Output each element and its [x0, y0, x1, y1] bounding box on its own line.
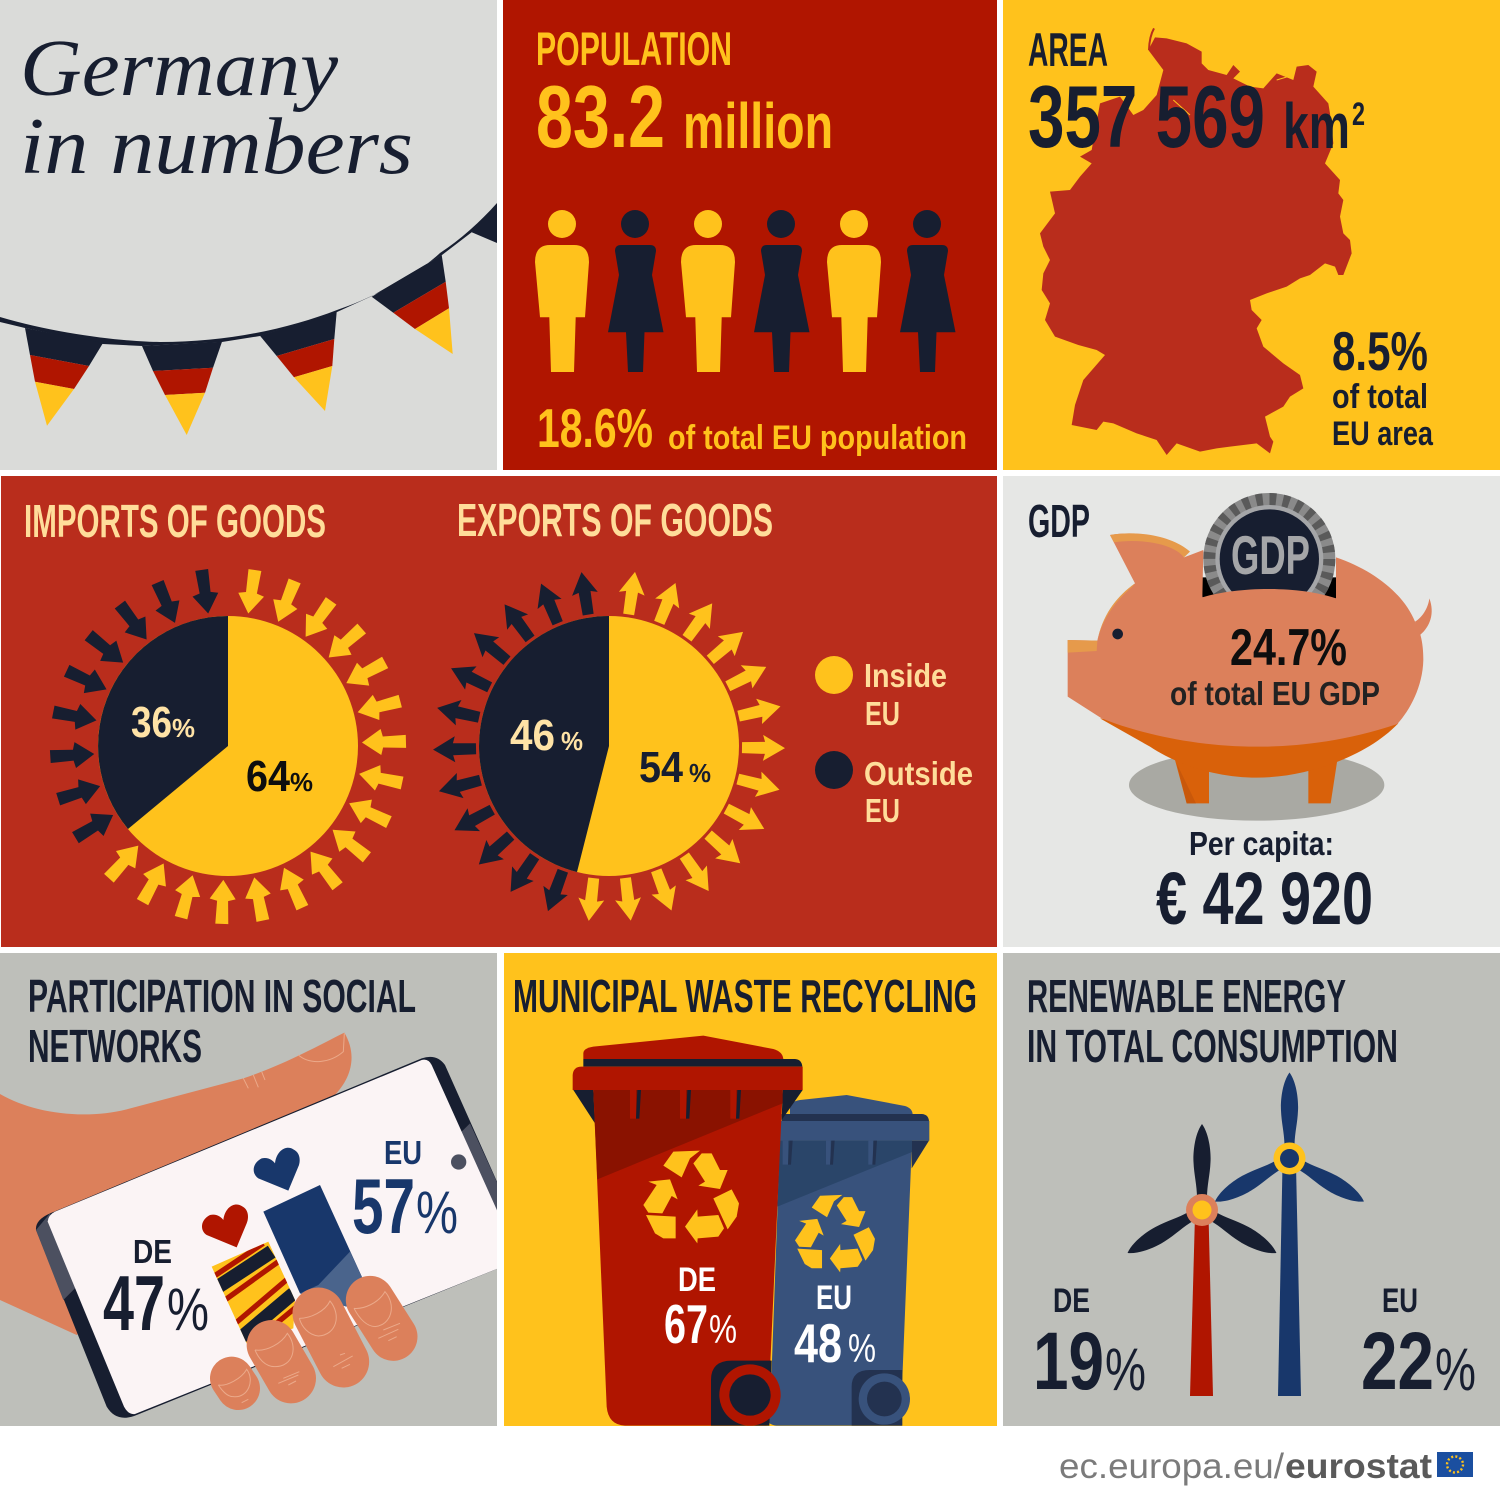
value: DE 47% — [104, 1240, 208, 1330]
value: EU 57%: % — [416, 1179, 458, 1246]
heading: area: AREA — [1028, 23, 1108, 76]
legend: Outside — [864, 755, 973, 792]
value: EU 22%: 22 — [1361, 1316, 1434, 1407]
panel: municipal waste recycling — [504, 953, 997, 1426]
panel: title — [0, 0, 497, 470]
population value: million — [683, 90, 833, 162]
title: Germany — [20, 25, 339, 113]
map: Germany — [1040, 28, 1352, 455]
footer: source: ec.europa.eu/ — [1059, 1447, 1284, 1486]
heading: social networks: PARTICIPATION IN SOCIAL — [28, 970, 416, 1022]
value: DE 67% — [665, 1268, 736, 1344]
GDP share: 24.7% — [1230, 619, 1347, 677]
icon: red wind turbine — [1123, 1124, 1281, 1396]
value: DE 19% — [1033, 1282, 1146, 1407]
title — [24, 41, 410, 174]
value: EU 57% — [354, 1141, 456, 1234]
chart: imports pie with arrows: % — [290, 767, 313, 797]
heading: social networks: NETWORKS — [28, 1020, 202, 1072]
panel: social networks — [0, 953, 507, 1426]
value: DE 19%: DE — [1053, 1282, 1090, 1320]
heading: GDP: GDP — [1028, 495, 1090, 547]
area share — [1332, 320, 1434, 453]
population value: 83.2 — [536, 67, 665, 166]
panel: population — [503, 0, 997, 470]
value: EU 22%: EU — [1382, 1282, 1418, 1320]
legend: EU — [865, 792, 900, 829]
icon: bunting flags — [0, 203, 497, 435]
value: DE 67%: 67 — [664, 1293, 708, 1355]
illustration: blue bin — [767, 1095, 929, 1426]
value: EU 22%: % — [1435, 1336, 1476, 1403]
panel: renewable energy — [1003, 953, 1500, 1426]
illustration: hand holding phone — [0, 1033, 507, 1418]
chart: imports pie with arrows: 64 — [246, 752, 290, 801]
footer: source: eurostat — [1285, 1447, 1432, 1486]
value: EU 22% — [1361, 1282, 1476, 1407]
heading: renewable energy — [1027, 970, 1398, 1072]
heading: social networks — [30, 980, 416, 1062]
chart: exports pie with arrows: % — [689, 758, 711, 788]
value: DE 47%: 47 — [103, 1259, 165, 1347]
chart: imports pie with arrows: 36 — [131, 698, 172, 747]
GDP per capita — [1156, 825, 1373, 940]
population share: 18.6% — [537, 397, 653, 459]
panel: GDP — [1003, 476, 1500, 947]
value: DE 67%: % — [709, 1308, 737, 1352]
legend: Inside — [864, 657, 947, 694]
value: EU 57%: 57 — [352, 1162, 415, 1250]
legend — [815, 656, 973, 829]
chart: exports pie with arrows — [433, 570, 785, 922]
population share — [537, 397, 967, 459]
heading: recycling: MUNICIPAL WASTE RECYCLING — [513, 970, 977, 1022]
GDP per capita: Per capita: — [1189, 825, 1334, 862]
chart: exports pie with arrows: 46 — [510, 711, 555, 760]
area share: EU area — [1332, 415, 1434, 453]
area share: of total — [1332, 378, 1428, 416]
value: DE 19%: 19 — [1033, 1316, 1104, 1407]
area share: 8.5% — [1332, 320, 1428, 382]
icon: row of people — [535, 210, 956, 372]
area value: 357 569 — [1028, 67, 1265, 166]
value: DE 47%: DE — [133, 1233, 172, 1270]
value: EU 57%: EU — [384, 1134, 422, 1171]
GDP share: of total EU GDP — [1170, 675, 1380, 712]
chart: exports pie with arrows: % — [561, 726, 583, 756]
panel: trade — [1, 476, 997, 947]
population value — [536, 67, 833, 166]
illustration: red bin — [573, 1036, 803, 1426]
GDP share — [1170, 619, 1380, 712]
value: EU 48%: % — [848, 1327, 876, 1371]
icon: piggy bank with coin: GDP — [1231, 524, 1310, 586]
value: DE 47%: % — [167, 1276, 209, 1343]
population share: of total EU population — [668, 419, 967, 457]
value: EU 48%: EU — [816, 1279, 852, 1317]
value: EU 48%: 48 — [794, 1312, 842, 1374]
heading: population: POPULATION — [536, 22, 732, 75]
footer: source — [1059, 1447, 1473, 1486]
value: EU 48% — [794, 1286, 875, 1362]
chart: exports pie with arrows: 54 — [639, 743, 683, 792]
legend: EU — [865, 695, 900, 732]
GDP per capita: € 42 920 — [1156, 857, 1373, 940]
chart: imports pie with arrows: % — [172, 713, 195, 743]
icon: piggy bank with coin — [1068, 500, 1432, 821]
area value: 2 — [1352, 96, 1365, 132]
value: DE 19%: % — [1105, 1336, 1146, 1403]
heading: imports: IMPORTS OF GOODS — [24, 495, 326, 547]
icon: EU flag — [1437, 1452, 1473, 1477]
chart: imports pie with arrows — [50, 568, 406, 924]
panel: area — [1003, 0, 1500, 470]
icon: blue wind turbine — [1211, 1072, 1368, 1396]
area value: km — [1283, 90, 1350, 162]
value: DE 67%: DE — [678, 1261, 716, 1299]
title: in numbers — [20, 103, 413, 191]
heading: exports: EXPORTS OF GOODS — [457, 494, 773, 546]
